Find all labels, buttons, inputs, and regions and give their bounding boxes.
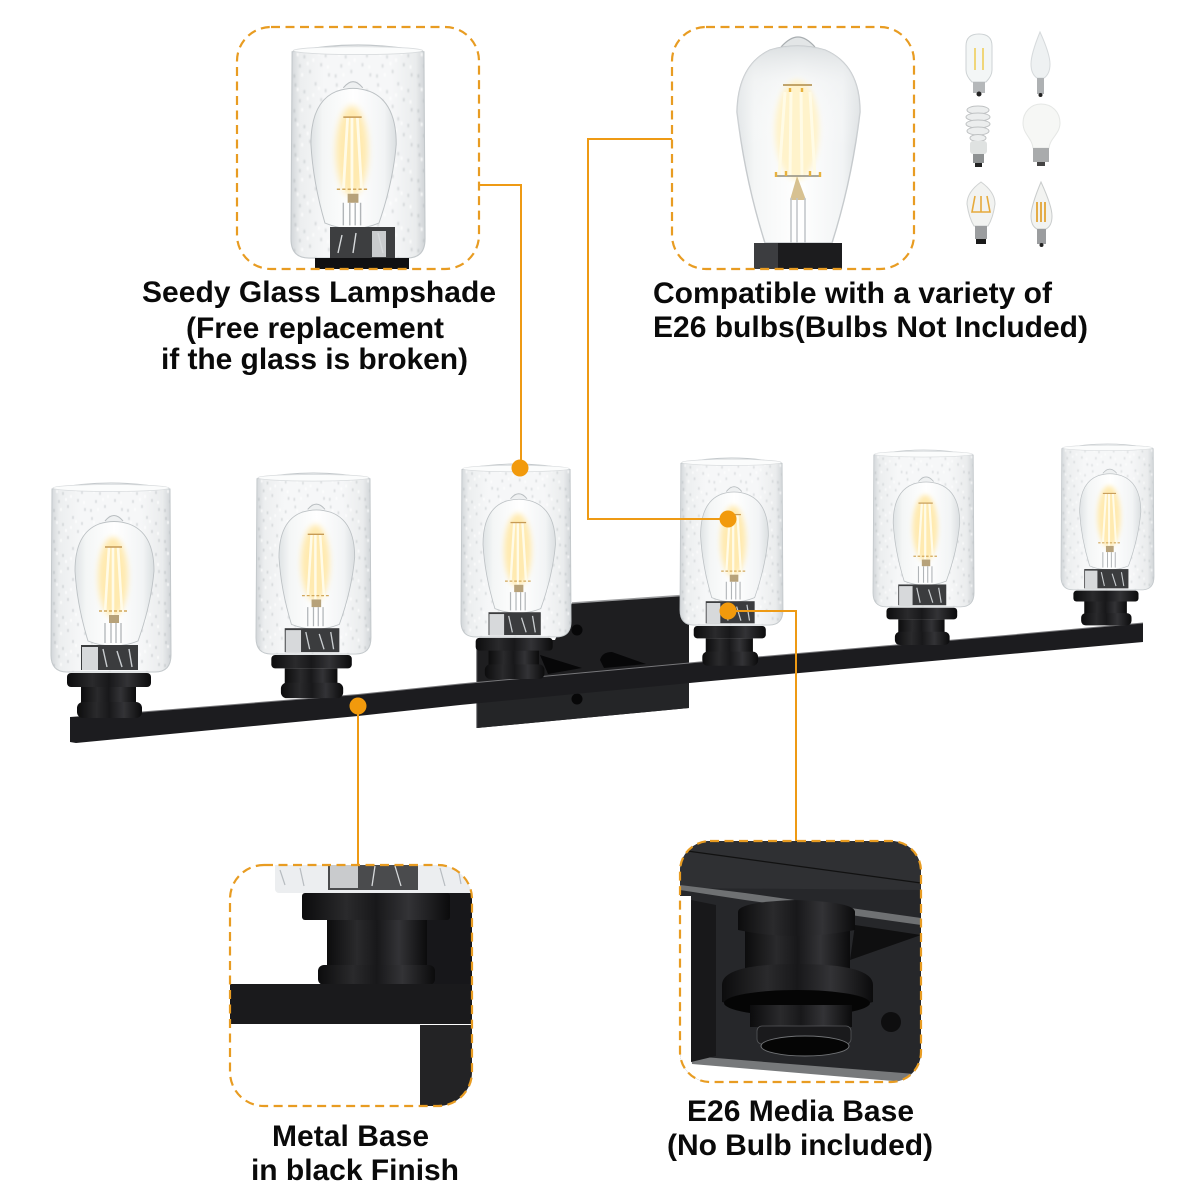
text: seedy glass lampshade label: if the glass is broken) — [161, 343, 468, 376]
connector: E26 base callout — [720, 602, 796, 841]
horizontal metal bar — [70, 623, 1143, 743]
text: E26 media base label: (No Bulb included) — [667, 1129, 933, 1162]
lamp 2 — [256, 473, 371, 698]
text: compatible bulbs label — [653, 277, 1088, 344]
wall mounting plate — [477, 595, 689, 728]
lamp 4 — [680, 458, 783, 666]
icon group: compatible bulb types — [966, 32, 1060, 247]
text: metal base label: in black Finish — [251, 1154, 459, 1187]
text: metal base label — [251, 1120, 459, 1187]
text: E26 media base label: E26 Media Base — [687, 1095, 914, 1128]
lamp 6 — [1061, 444, 1154, 625]
panel: seedy glass lampshade detail — [237, 27, 479, 272]
lamp 5 — [873, 450, 974, 645]
text: E26 media base label — [667, 1095, 933, 1162]
connector: bulb callout — [588, 139, 736, 528]
text: compatible bulbs label: Compatible with a variety of — [653, 277, 1053, 310]
text: seedy glass lampshade label: Seedy Glass Lampshade — [142, 276, 496, 309]
lamp 3 — [461, 464, 571, 679]
text: seedy glass lampshade label — [142, 276, 496, 376]
icon: ST filament bulb — [967, 182, 995, 244]
icon: candle filament bulb — [1031, 182, 1052, 247]
vanity light fixture — [51, 444, 1154, 743]
icon: spiral CFL bulb — [966, 106, 990, 167]
connector: metal base callout — [350, 698, 366, 865]
lamp 1 — [51, 483, 171, 718]
text: metal base label: Metal Base — [272, 1120, 429, 1153]
connector: seedy glass callout — [479, 185, 528, 476]
panel: E26 bulb detail — [672, 27, 914, 273]
icon: clear candle bulb — [1031, 32, 1050, 97]
panel: metal base detail — [230, 860, 472, 1110]
text: seedy glass lampshade label: (Free replacement — [186, 312, 444, 345]
icon: frosted A-shape bulb — [1023, 104, 1060, 166]
icon: tubular LED bulb — [966, 34, 992, 96]
text: compatible bulbs label: E26 bulbs(Bulbs Not Included) — [653, 311, 1088, 344]
panel: E26 socket detail — [678, 841, 921, 1086]
